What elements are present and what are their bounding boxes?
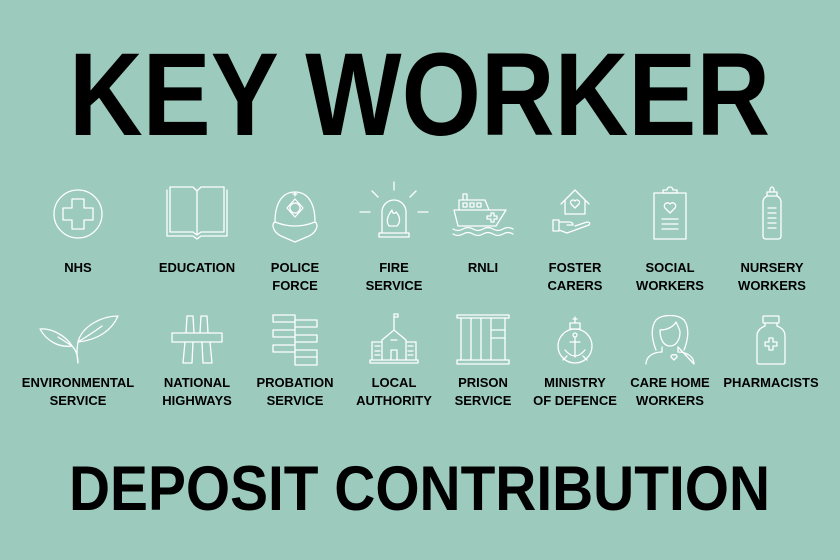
icon: RNLI [453, 194, 513, 236]
subtitle: DEPOSIT CONTRIBUTION [69, 454, 770, 524]
text: SERVICE [50, 393, 107, 408]
label: education: EDUCATION [159, 260, 235, 275]
text: FORCE [272, 278, 318, 293]
text: WORKERS [636, 393, 704, 408]
text: WORKERS [636, 278, 704, 293]
icon: care home [646, 316, 694, 364]
text: CARERS [548, 278, 603, 293]
label: RNLI: RNLI [468, 260, 498, 275]
label: probation: PROBATION [256, 375, 334, 390]
label: national highways: NATIONAL [164, 375, 230, 390]
icon: social workers [654, 187, 686, 239]
label: environmental: ENVIRONMENTAL [22, 375, 134, 390]
icon: fire [360, 182, 428, 237]
text: OF DEFENCE [533, 393, 617, 408]
text: HIGHWAYS [162, 393, 232, 408]
icon: local authority [370, 314, 418, 363]
label: MOD: MINISTRY [544, 375, 606, 390]
label: NHS: NHS [64, 260, 92, 275]
label: care home: CARE HOME [630, 375, 710, 390]
text: WORKERS [738, 278, 806, 293]
label: nursery workers: NURSERY [740, 260, 804, 275]
text: SERVICE [455, 393, 512, 408]
icon: foster [553, 190, 590, 233]
text: SERVICE [267, 393, 324, 408]
label: prison: PRISON [458, 375, 508, 390]
icon: pharmacist [757, 316, 785, 364]
label: social workers: SOCIAL [645, 260, 695, 275]
icon: police [273, 192, 317, 242]
icon: probation [273, 315, 317, 365]
label: foster carers: FOSTER [549, 260, 602, 275]
icon: education [167, 187, 227, 239]
label: police force: POLICE [271, 260, 320, 275]
text: SERVICE [366, 278, 423, 293]
label: pharmacists: PHARMACISTS [723, 375, 819, 390]
label: fire service: FIRE [379, 260, 409, 275]
text: AUTHORITY [356, 393, 432, 408]
icon: highways [172, 316, 222, 363]
icon: MOD [558, 317, 592, 363]
icon: prison [457, 315, 509, 364]
icon: NHS [54, 190, 102, 238]
label: local authority: LOCAL [372, 375, 416, 390]
icon: environmental [40, 316, 118, 363]
icon: nursery [763, 187, 781, 239]
